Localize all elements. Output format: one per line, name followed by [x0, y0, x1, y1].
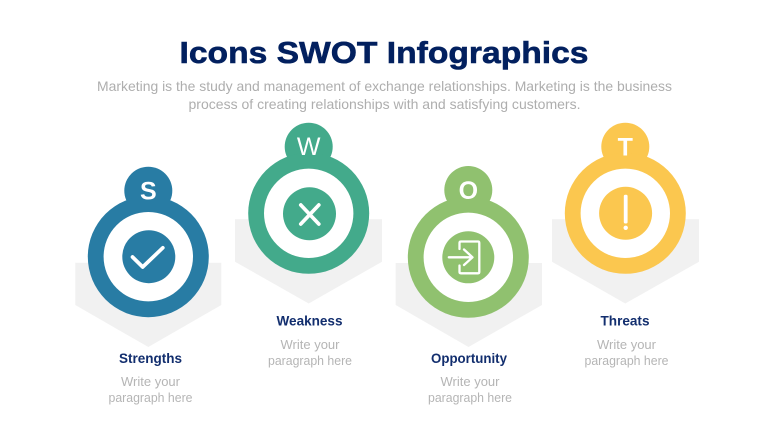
- intro paragraph: [97, 78, 672, 112]
- icon: check mark: [132, 248, 163, 267]
- threats heading: Threats: [600, 312, 650, 328]
- strengths badge: [88, 167, 209, 317]
- strengths text: paragraph here: [108, 390, 192, 405]
- threats text: [584, 337, 668, 368]
- weakness badge: [248, 123, 369, 274]
- threats text: Write your: [597, 337, 657, 352]
- strengths text: [108, 374, 192, 405]
- strengths backing shape: [75, 263, 221, 347]
- weakness heading: Weakness: [276, 312, 343, 328]
- opportunity text: paragraph here: [428, 390, 512, 405]
- threats text: paragraph here: [584, 353, 668, 368]
- opportunity badge: [408, 166, 529, 318]
- strengths badge: S: [140, 177, 157, 205]
- intro paragraph: Marketing is the study and management of exchange relationships. Marketing is the business: [97, 78, 672, 94]
- weakness text: paragraph here: [268, 353, 352, 368]
- icon: exclamation: [624, 195, 628, 230]
- title: Icons SWOT Infographics: [180, 35, 588, 70]
- weakness text: [268, 337, 352, 368]
- intro paragraph: process of creating relationships with and satisfying customers.: [188, 96, 580, 112]
- weakness badge: W: [297, 133, 321, 161]
- panel: weakness: [235, 123, 382, 368]
- opportunity heading: Opportunity: [431, 350, 507, 366]
- weakness backing shape: [235, 219, 382, 304]
- strengths heading: Strengths: [119, 350, 182, 366]
- opportunity text: Write your: [440, 374, 500, 389]
- opportunity badge: O: [459, 177, 478, 205]
- weakness text: Write your: [280, 337, 340, 352]
- icon: cross: [301, 205, 319, 224]
- opportunity text: [428, 374, 512, 405]
- panel: opportunity: [396, 166, 542, 405]
- strengths text: Write your: [121, 374, 181, 389]
- threats badge: [565, 123, 686, 274]
- threats badge: T: [618, 134, 633, 162]
- opportunity backing shape: [396, 263, 542, 347]
- panel: strengths: [75, 167, 221, 405]
- threats backing shape: [552, 219, 699, 304]
- panel: threats: [552, 123, 699, 368]
- icon: enter arrow: [449, 242, 479, 273]
